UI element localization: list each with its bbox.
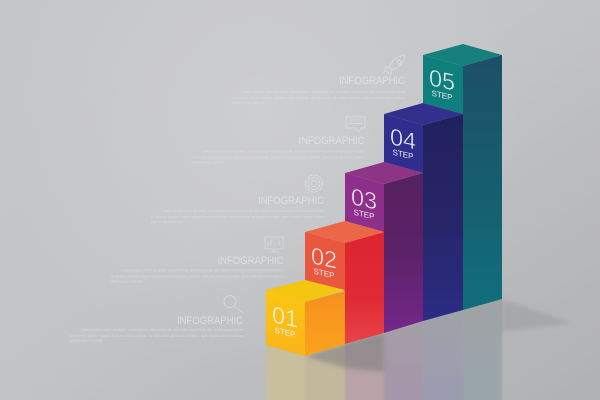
text block: step 4 info xyxy=(192,117,365,164)
text block: step 1 info: ullamcorper suscipit xyxy=(70,339,103,343)
bar: step 2 xyxy=(305,221,384,344)
text block: step 4 info: Lorem ipsum dolor sit amet, consectetuer adipiscing elit, sed diam nonummy nibh euismod tincidunt xyxy=(202,150,364,154)
bar: step 1 xyxy=(266,280,345,356)
text block: step 2 info: ut laoreet dolore magna aliquam erat volutpat. Ut wisi enim ad minim veniam, quis nostrud exerci tation xyxy=(110,274,284,278)
number 02: 02 xyxy=(311,242,337,275)
text block: step 3 info: ullamcorper suscipit xyxy=(151,220,184,224)
number 03: 03 xyxy=(351,183,377,216)
label step 3: STEP xyxy=(354,208,374,221)
bar: step 5 xyxy=(423,44,502,310)
text block: step 1 info xyxy=(70,296,243,343)
icon: speech bubble xyxy=(346,117,365,132)
text block: step 3 info xyxy=(151,175,324,224)
icon: rocket xyxy=(382,55,405,74)
floor reflection xyxy=(266,299,502,400)
text block: step 1 info: INFOGRAPHIC xyxy=(177,315,243,327)
label step 4: STEP xyxy=(393,148,413,161)
text block: step 2 info: ullamcorper suscipit xyxy=(110,280,143,284)
text block: step 2 info xyxy=(110,237,284,284)
cast shadows xyxy=(305,299,572,372)
label step 2: STEP xyxy=(314,267,334,280)
number 05: 05 xyxy=(429,64,455,97)
bar: step 3 xyxy=(345,162,423,333)
icon: gear xyxy=(306,175,322,192)
text block: step 5 info: ut laoreet dolore magna aliquam erat volutpat. Ut wisi enim ad minim veniam, quis nostrud exerci tation xyxy=(232,96,405,100)
text block: step 5 info: Lorem ipsum dolor sit amet, consectetuer adipiscing elit, sed diam nonummy nibh euismod tincidunt xyxy=(243,90,405,94)
text block: step 5 info xyxy=(232,55,405,105)
number 04: 04 xyxy=(390,123,416,156)
text block: step 1 info: Lorem ipsum dolor sit amet, consectetuer adipiscing elit, sed diam nonummy nibh euismod tincidunt xyxy=(81,328,243,332)
text block: step 3 info: ut laoreet dolore magna aliquam erat volutpat. Ut wisi enim ad minim veniam, quis nostrud exerci tation xyxy=(151,215,324,219)
label step 1: STEP xyxy=(275,326,295,339)
text block: step 3 info: Lorem ipsum dolor sit amet, consectetuer adipiscing elit, sed diam nonummy nibh euismod tincidunt xyxy=(162,209,324,213)
text block: step 2 info: INFOGRAPHIC xyxy=(218,255,284,267)
text block: step 2 info: Lorem ipsum dolor sit amet, consectetuer adipiscing elit, sed diam nonummy nibh euismod tincidunt xyxy=(122,268,284,272)
icon: magnifier xyxy=(224,296,243,313)
bar: step 4 xyxy=(384,103,463,321)
text block: step 3 info: INFOGRAPHIC xyxy=(258,195,324,207)
text block: step 4 info: ut laoreet dolore magna aliquam erat volutpat. Ut wisi enim ad minim veniam, quis nostrud exerci tation xyxy=(192,156,364,160)
label step 5: STEP xyxy=(432,89,452,102)
text block: step 5 info: INFOGRAPHIC xyxy=(339,75,405,87)
text block: step 1 info: ut laoreet dolore magna aliquam erat volutpat. Ut wisi enim ad minim veniam, quis nostrud exerci tation xyxy=(70,334,243,338)
number 01: 01 xyxy=(272,301,298,334)
text block: step 5 info: ullamcorper suscipit xyxy=(232,101,265,105)
text block: step 4 info: ullamcorper suscipit xyxy=(192,160,224,164)
icon: monitor chart xyxy=(265,237,283,252)
text block: step 4 info: INFOGRAPHIC xyxy=(298,135,365,147)
